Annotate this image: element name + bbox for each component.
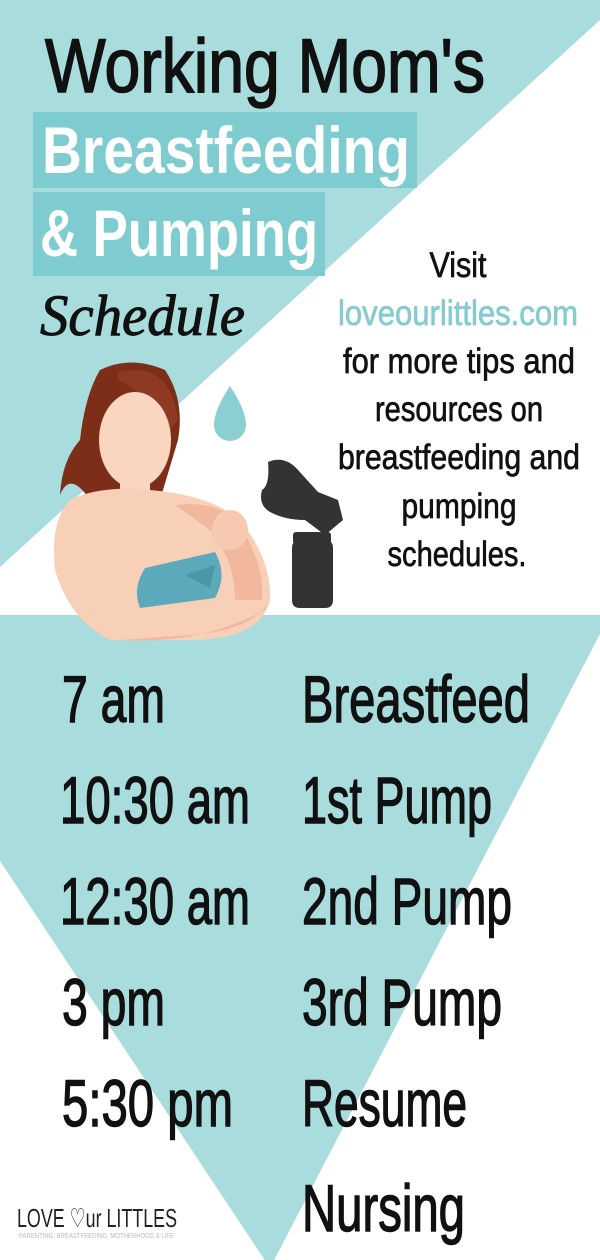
schedule: times: 10:30 am [60, 763, 250, 837]
callout: visit site: for more tips and [343, 342, 575, 381]
icon: milk drop [214, 386, 246, 441]
logo: LOVE ♡ur LITTLES [17, 1203, 177, 1233]
schedule: activities: Resume [302, 1066, 467, 1140]
schedule: times [60, 662, 250, 1140]
schedule: activities: 3rd Pump [302, 965, 502, 1039]
schedule: times: 5:30 pm [62, 1066, 233, 1140]
highlight: Breastfeeding: Breastfeeding [42, 113, 410, 187]
callout: visit site: Visit [430, 246, 487, 285]
callout: visit site: resources on [375, 390, 543, 429]
logo: PARENTING, BREASTFEEDING, MOTHERHOOD & LIFE [19, 1233, 174, 1240]
icon: breast pump [261, 460, 343, 608]
schedule: times: 3 pm [62, 965, 165, 1039]
schedule: activities [302, 662, 530, 1245]
highlight: & Pumping: & Pumping [40, 196, 318, 270]
schedule: activities: Nursing [302, 1171, 465, 1245]
schedule: times: 12:30 am [60, 864, 250, 938]
schedule: activities: 1st Pump [302, 763, 492, 837]
title: Working Mom's [45, 24, 485, 109]
callout: visit site: pumping [402, 487, 516, 526]
schedule: activities: 2nd Pump [302, 864, 512, 938]
script subtitle: Schedule [40, 283, 245, 348]
callout: visit site [338, 246, 580, 574]
callout: visit site: schedules. [388, 535, 526, 574]
illustration: mother nursing baby [54, 362, 270, 641]
logo [17, 1203, 177, 1240]
schedule: times: 7 am [62, 662, 165, 736]
